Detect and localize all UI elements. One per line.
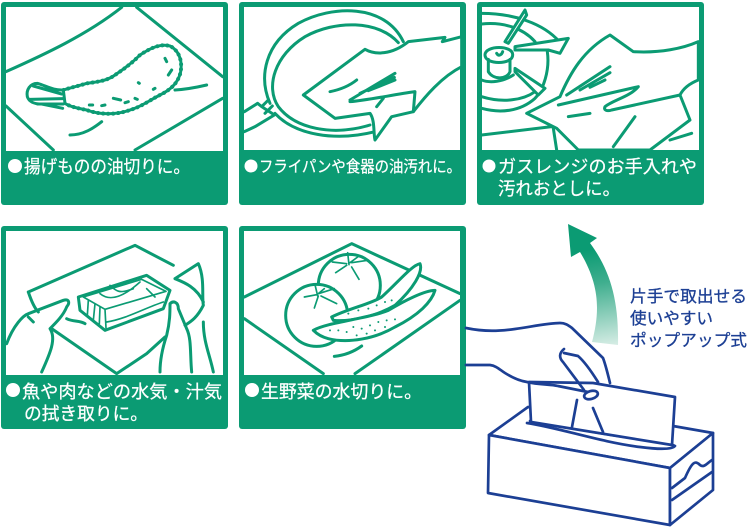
illustration: fried shrimp on paper (6, 7, 223, 150)
illustration: hands holding paper with fish (7, 245, 213, 374)
bullet (8, 159, 22, 173)
illustration: hand wiping gas range (482, 10, 698, 150)
caption: フライパンや食器の油汚れに。 (259, 158, 461, 176)
hand (466, 323, 610, 432)
panel: gas range: 汚れおとしに。 (498, 179, 620, 199)
caption: 生野菜の水切りに。 (261, 382, 422, 402)
panel: gas range (477, 2, 704, 205)
bullet (245, 383, 259, 397)
caption: ガスレンジのお手入れや (498, 157, 697, 177)
caption: 魚や肉などの水気・汁気 (22, 382, 222, 402)
panel: fish and meat: の拭き取りに。 (24, 404, 148, 424)
bullet (244, 160, 258, 172)
caption: 揚げものの油切りに。 (24, 157, 190, 177)
callout: one-hand pop-up text: 使いやすい (630, 309, 713, 328)
illustration: tomatoes and cucumbers on paper (244, 244, 460, 374)
callout: one-hand pop-up text: 片手で取出せる (630, 287, 747, 306)
illustration: hand wiping frying pan (244, 11, 462, 140)
panel: frying pan and dishes (239, 2, 466, 205)
tissue (529, 382, 675, 445)
illustration: hand pulling tissue from box (466, 323, 713, 525)
bullet (6, 383, 20, 397)
arrow: upward curved gradient (568, 224, 618, 345)
callout: one-hand pop-up text: ポップアップ式 (630, 331, 747, 350)
panel: fish and meat (1, 226, 228, 429)
panel: deep-fried food (1, 2, 228, 205)
bullet (482, 160, 496, 172)
tissue box (488, 407, 713, 525)
panel: raw vegetables (239, 226, 466, 429)
